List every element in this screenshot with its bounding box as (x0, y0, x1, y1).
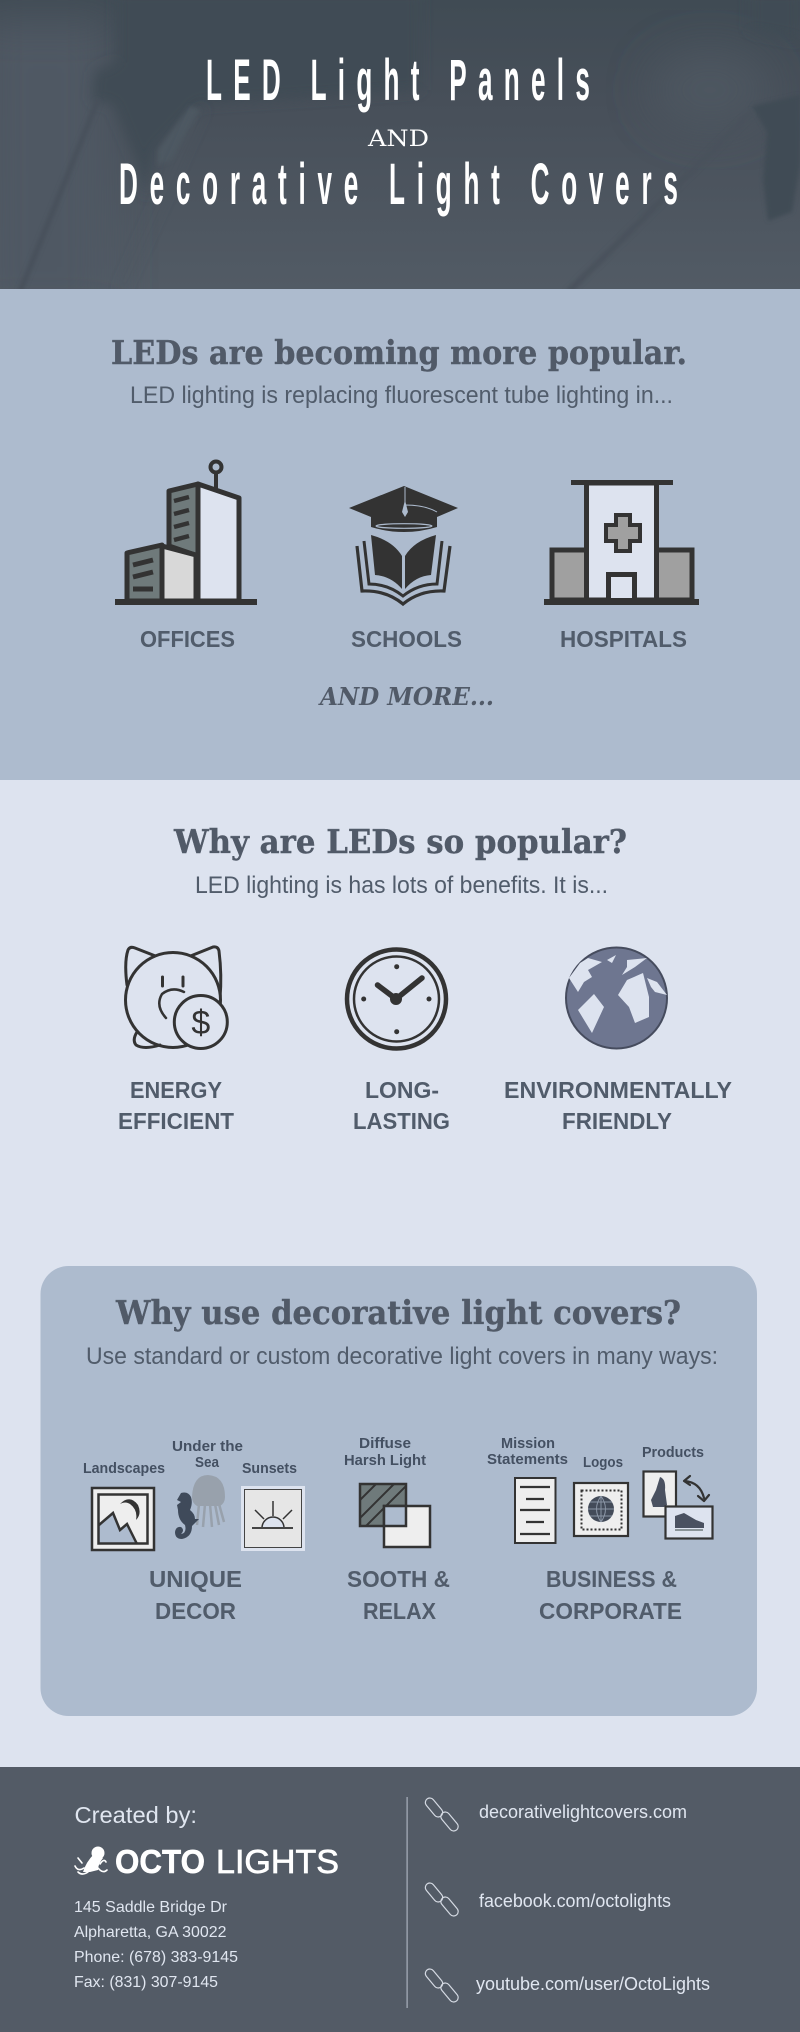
heading: LEDs are becoming more popular. (111, 333, 687, 372)
label: business and corporate: CORPORATE (539, 1598, 682, 1624)
icon: product frames (644, 1472, 712, 1538)
icon: jellyfish (192, 1475, 225, 1527)
label: business and corporate (539, 1566, 682, 1624)
contact address: Alpharetta, GA 30022 (74, 1924, 227, 1941)
icon: graduation cap and book (349, 486, 458, 604)
panel: LEDs are becoming more popular (0, 289, 800, 780)
label: environmentally friendly: ENVIRONMENTALLY (504, 1077, 732, 1103)
created by: Created by: (74, 1802, 197, 1828)
icon: globe (566, 948, 667, 1048)
label: offices: OFFICES (140, 626, 235, 652)
panel: footer (0, 1767, 800, 2032)
icon: logo frame (574, 1483, 628, 1536)
link: youtube: youtube.com/user/OctoLights (476, 1973, 710, 1994)
label: long-lasting: LONG- (365, 1077, 439, 1103)
label: unique decor (149, 1566, 242, 1624)
label: mission statements: Mission (501, 1435, 555, 1452)
label: logos: Logos (583, 1454, 623, 1471)
label: diffuse harsh light: Diffuse (359, 1435, 411, 1452)
label: long-lasting (353, 1077, 450, 1134)
icon: link 1 (423, 1796, 460, 1833)
icon: link 2 (423, 1881, 460, 1918)
contact address: Fax: (831) 307-9145 (74, 1974, 218, 1991)
label: environmentally friendly: FRIENDLY (562, 1108, 672, 1134)
label: unique decor: UNIQUE (149, 1566, 242, 1592)
label: hospitals: HOSPITALS (560, 626, 687, 652)
subheading: Use standard or custom decorative light covers in many ways: (86, 1343, 718, 1370)
link: facebook: facebook.com/octolights (479, 1890, 671, 1911)
subheading: LED lighting is replacing fluorescent tube lighting in... (130, 382, 673, 409)
panel: why use decorative light covers (40, 1266, 757, 1716)
header photo background (0, 0, 800, 320)
label: sunsets: Sunsets (242, 1460, 297, 1477)
label: energy efficient: ENERGY (130, 1077, 222, 1103)
label: under the sea: Sea (195, 1454, 220, 1471)
title: and: AND (367, 127, 429, 152)
icon: hospital (544, 480, 699, 605)
icon: landscape frame (92, 1488, 154, 1550)
subheading: LED lighting is has lots of benefits. It is... (195, 872, 608, 899)
title line 1: LED Light Panels (206, 47, 590, 113)
icon: seahorse (175, 1492, 199, 1539)
header banner (0, 0, 800, 320)
contact address (74, 1899, 238, 1991)
icon: mission statement document (515, 1478, 556, 1543)
label: under the sea (172, 1438, 243, 1471)
label: sooth and relax: RELAX (363, 1598, 436, 1624)
heading: Why are LEDs so popular? (173, 822, 627, 861)
logo: octo lights: LIGHTS (216, 1843, 339, 1880)
label: sooth and relax: SOOTH & (347, 1566, 450, 1592)
title line 2: Decorative Light Covers (119, 151, 678, 217)
label: long-lasting: LASTING (353, 1108, 450, 1134)
and more text: AND MORE... (318, 682, 494, 711)
label: schools: SCHOOLS (351, 626, 462, 652)
logo: octo lights (75, 1843, 339, 1880)
icon: office buildings (115, 462, 257, 605)
divider (406, 1797, 408, 2008)
logo: octo lights: OCTO (115, 1843, 205, 1880)
icon: sunset frame (241, 1486, 305, 1551)
icon: link 3 (423, 1967, 460, 2004)
icon: piggy bank with coin: $ (191, 1004, 210, 1042)
label: diffuse harsh light (344, 1435, 426, 1469)
contact address: Phone: (678) 383-9145 (74, 1949, 238, 1966)
icon: clock (347, 950, 446, 1048)
label: products: Products (642, 1444, 704, 1461)
icon: octopus (75, 1846, 107, 1874)
link: website: decorativelightcovers.com (479, 1801, 687, 1822)
panel: why are LEDs so popular (0, 780, 800, 1767)
label: mission statements: Statements (487, 1451, 568, 1468)
label: energy efficient (118, 1077, 235, 1134)
heading: Why use decorative light covers? (115, 1293, 681, 1332)
icon: diffuser squares (360, 1484, 430, 1547)
label: sooth and relax (347, 1566, 450, 1624)
label: energy efficient: EFFICIENT (118, 1108, 235, 1134)
label: diffuse harsh light: Harsh Light (344, 1452, 426, 1469)
label: business and corporate: BUSINESS & (546, 1566, 677, 1592)
label: landscapes: Landscapes (83, 1460, 165, 1477)
label: mission statements (487, 1435, 568, 1468)
icon: piggy bank with coin (126, 947, 227, 1048)
label: under the sea: Under the (172, 1438, 243, 1455)
contact address: 145 Saddle Bridge Dr (74, 1899, 228, 1916)
label: environmentally friendly (504, 1077, 732, 1134)
label: unique decor: DECOR (155, 1598, 236, 1624)
